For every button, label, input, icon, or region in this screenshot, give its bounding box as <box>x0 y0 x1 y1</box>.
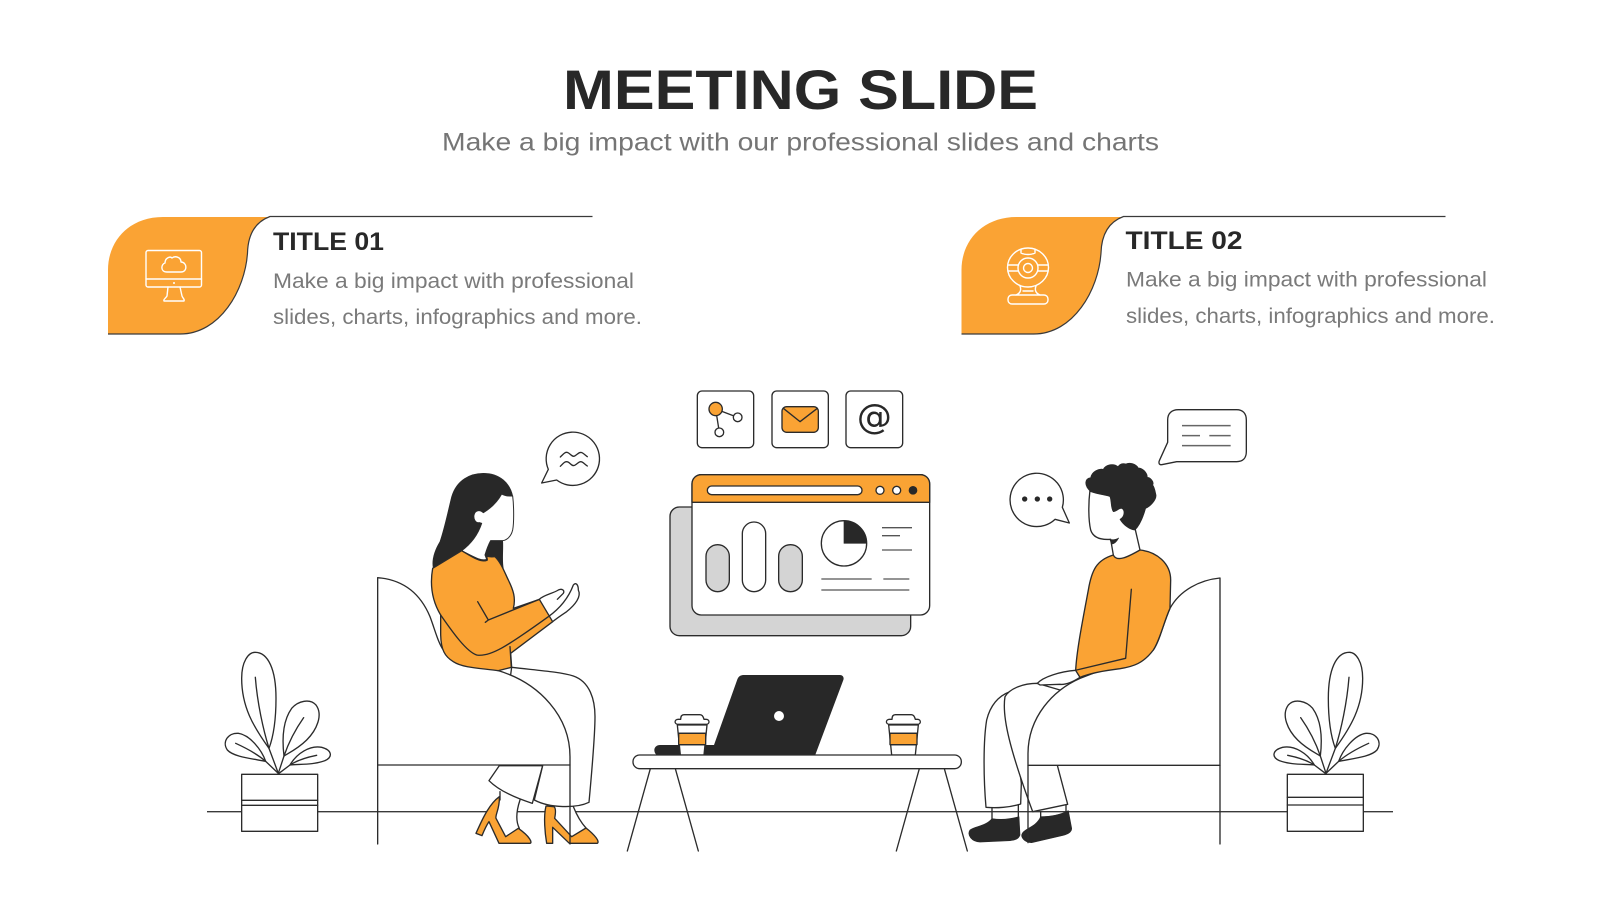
coffee cup: right <box>886 715 920 755</box>
heading: title 01: TITLE 01 <box>273 228 384 256</box>
subtitle: Make a big impact with our professional slides and charts <box>442 128 1159 156</box>
icon: cloud monitor <box>146 250 202 301</box>
man: curly hair <box>1086 463 1156 530</box>
description line 2: slides, charts, infographics and more. <box>1126 305 1495 328</box>
window header <box>692 475 930 502</box>
speech bubble: waves <box>542 432 599 485</box>
floor line <box>207 811 1393 813</box>
chair: right <box>1028 578 1220 844</box>
pot <box>1287 774 1363 831</box>
plant: left <box>225 652 330 831</box>
chair: left <box>378 578 570 844</box>
icon: at sign: @ <box>857 397 892 437</box>
speech bubble: dots <box>1010 473 1069 527</box>
woman: hands <box>539 584 579 622</box>
dashboard: window <box>692 475 930 615</box>
icon: share nodes <box>697 391 754 448</box>
icon: envelope <box>772 391 828 448</box>
description line 2: slides, charts, infographics and more. <box>273 306 642 329</box>
icon: webcam <box>1008 248 1048 304</box>
dashboard: back panel <box>670 507 911 636</box>
scene: woman, chair and plant <box>225 432 599 844</box>
description line 1: Make a big impact with professional <box>273 270 634 293</box>
scene: man, chair and plant <box>969 410 1379 844</box>
woman: orange sweater <box>432 551 553 671</box>
woman: face and neck <box>462 494 514 560</box>
speech bubble: text lines <box>1159 410 1246 465</box>
orange tab shape <box>108 217 270 334</box>
text lines <box>821 528 912 590</box>
pie chart <box>821 521 867 566</box>
coffee cup: left <box>675 715 709 755</box>
table <box>627 755 967 851</box>
man: beard shadow <box>1110 538 1119 544</box>
icon: at sign <box>846 391 903 448</box>
description line 1: Make a big impact with professional <box>1126 268 1487 292</box>
tab outline and header rule <box>962 216 1446 334</box>
panel: title 02 <box>962 216 1495 334</box>
scene: table, laptop and cups <box>627 675 967 851</box>
laptop <box>654 675 844 756</box>
man: legs and shoes <box>969 683 1072 843</box>
tab outline and header rule <box>108 216 592 334</box>
heading: title 02: TITLE 02 <box>1126 227 1242 255</box>
scene: app icons and dashboard <box>670 391 930 636</box>
plant: right <box>1274 652 1379 831</box>
leaves <box>1274 652 1379 773</box>
leaves <box>225 652 330 773</box>
orange tab shape <box>962 217 1124 334</box>
bar chart <box>706 522 802 592</box>
man: hand <box>1037 670 1080 685</box>
man: orange sweater <box>1076 550 1171 677</box>
woman: hair <box>433 473 513 580</box>
panel: title 01 <box>108 216 642 334</box>
woman: legs and shoes <box>476 667 598 843</box>
title: MEETING SLIDE <box>563 58 1038 121</box>
man: face and neck <box>1089 490 1140 560</box>
pot <box>242 774 318 831</box>
